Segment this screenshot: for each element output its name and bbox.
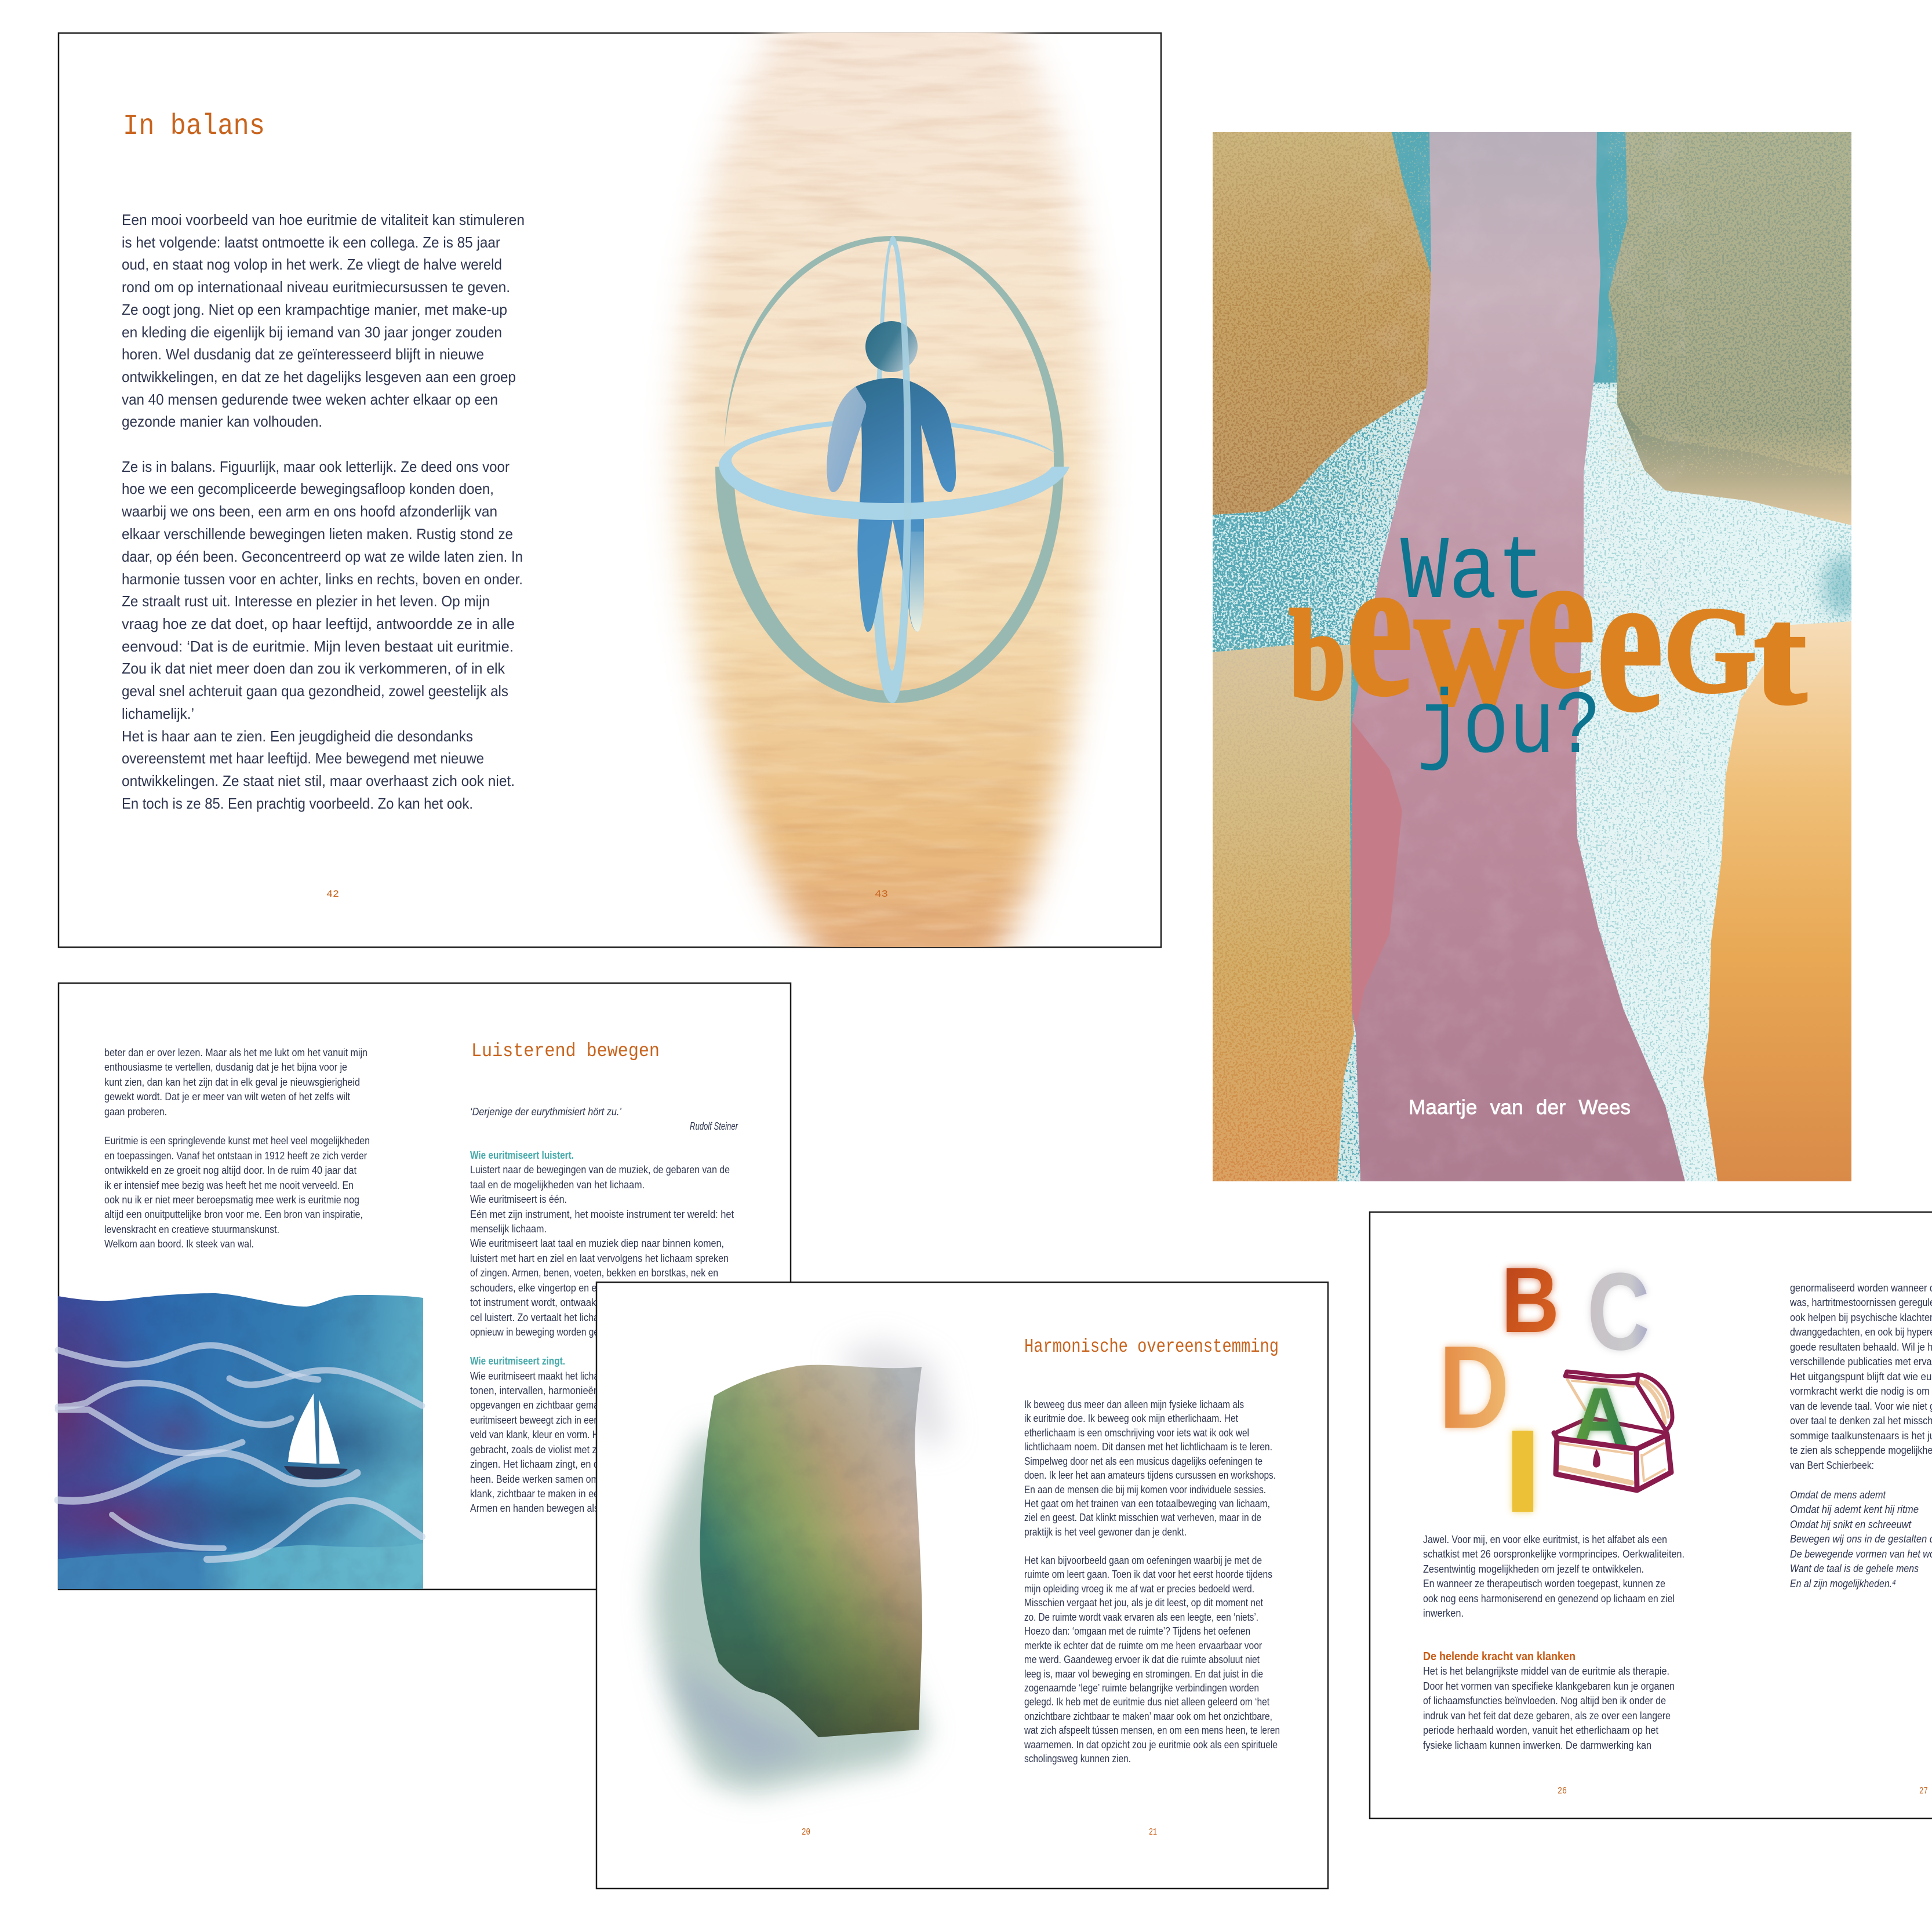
pale base right <box>1565 388 1851 1181</box>
white speckle lower left <box>1333 1020 1368 1181</box>
pink lobe <box>1352 721 1402 1030</box>
section: luistert: of zingen. Armen, benen, voeten, bekken en borstkas, nek en <box>470 1267 718 1279</box>
title word beweegt: e <box>1347 515 1413 737</box>
chest lid <box>1555 1371 1672 1433</box>
section: zingt: Wie euritmiseert maakt het licha <box>470 1370 599 1382</box>
section: zingt: veld van klank, kleur en vorm. H <box>470 1429 599 1440</box>
poem: Omdat de mens ademt <box>1790 1489 1886 1501</box>
section: luistert: Wie euritmiseert is één. <box>470 1194 567 1205</box>
title word Wat: Wat <box>1400 522 1545 624</box>
left column text: inwerken. <box>1423 1607 1464 1619</box>
body text: harmonie tussen voor en achter, links en rechts, boven en onder. <box>122 570 523 588</box>
left column text <box>1423 1534 1684 1619</box>
section: luistert: taal en de mogelijkheden van het lichaam. <box>470 1179 645 1191</box>
left column text: kunt zien, dan kan het zijn dat in elk geval je nieuwsgierigheid <box>104 1076 360 1088</box>
body text: Hoezo dan: ‘omgaan met de ruimte’? Tijdens het oefenen <box>1024 1625 1250 1637</box>
page number 26: 26 <box>1558 1786 1567 1797</box>
tan speckle bottom-left <box>1213 645 1354 1181</box>
body text: is het volgende: laatst ontmoette ik een collega. Ze is 85 jaar <box>122 234 500 251</box>
body text: eenvoud: ‘Dat is de euritmie. Mijn leven bestaat uit euritmie. <box>122 638 514 655</box>
sailboat <box>284 1393 348 1479</box>
left column text: altijd een onuitputtelijke bron voor me. Een bron van inspiratie, <box>104 1209 363 1220</box>
left column text: Euritmie is een springlevende kunst met heel veel mogelijkheden <box>104 1135 370 1147</box>
body text: gelegd. Ik heb met de euritmie dus niet alleen geleerd om ‘het <box>1024 1696 1269 1708</box>
left column text: Jawel. Voor mij, en voor elke euritmist, is het alfabet als een <box>1423 1534 1667 1545</box>
poem <box>1790 1489 1932 1589</box>
body text: overeenstemt met haar leeftijd. Mee bewegend met nieuwe <box>122 749 484 767</box>
section: luistert: luistert met hart en ziel en laat vervolgens het lichaam spreken <box>470 1253 729 1264</box>
quote attribution: Rudolf Steiner <box>690 1120 738 1132</box>
title word beweegt: G <box>1664 583 1756 718</box>
body text: en kleding die eigenlijk bij iemand van 30 jaar jonger zouden <box>122 323 502 341</box>
body text: Zou ik dat niet meer doen dan zou ik verkommeren, of in elk <box>122 660 505 677</box>
body text: rond om op internationaal niveau euritmiecursussen te geven. <box>122 278 510 296</box>
section text: Het is het belangrijkste middel van de euritmie als therapie. <box>1423 1665 1669 1677</box>
bottom-right colour field <box>1703 621 1851 1181</box>
title word jou: jou? <box>1417 677 1601 779</box>
title word beweegt <box>1289 510 1806 752</box>
page frame <box>59 983 791 1589</box>
body text: lichamelijk.’ <box>122 705 194 722</box>
page frame <box>1370 1212 1932 1818</box>
section: zingt: tonen, intervallen, harmonieën <box>470 1385 599 1396</box>
body text: horen. Wel dusdanig dat ze geïnteresseerd blijft in nieuwe <box>122 345 484 363</box>
panel: spread Harmonische overeenstemming <box>596 1282 1328 1889</box>
teal base cross <box>1213 132 1851 1181</box>
body text: Ze is in balans. Figuurlijk, maar ook letterlijk. Ze deed ons voor <box>122 458 510 475</box>
body text: wat zich afspeelt tússen mensen, en om een mens heen, te leren <box>1024 1724 1280 1736</box>
illustration: figure in sphere on sand oval <box>658 32 1118 947</box>
section: zingt: Wie euritmiseert zingt. <box>470 1355 565 1367</box>
chest back rim <box>1555 1418 1666 1433</box>
title word beweegt: e <box>1597 531 1663 752</box>
body text: geval snel achteruit gaan qua gezondheid, zowel geestelijk als <box>122 682 508 700</box>
left column text: en toepassingen. Vanaf het ontstaan in 1912 heeft ze zich verder <box>104 1150 367 1162</box>
sphere outer band <box>715 236 1064 703</box>
section: zingt <box>470 1355 599 1514</box>
heading: Luisterend bewegen <box>471 1040 660 1062</box>
vertical ring, back strand <box>872 236 911 703</box>
section: luistert: menselijk lichaam. <box>470 1223 547 1235</box>
body text: Ik beweeg dus meer dan alleen mijn fysieke lichaam als <box>1024 1399 1244 1410</box>
section text: periode herhaald worden, vanuit het etherlichaam op het <box>1423 1724 1658 1736</box>
left column text: Welkom aan boord. Ik steek van wal. <box>104 1238 254 1250</box>
author: Maartje van der Wees <box>1409 1096 1631 1119</box>
tan speckle top-right <box>1609 132 1851 475</box>
section: zingt: heen. Beide werken samen om <box>470 1473 599 1485</box>
watercolour sea <box>0 1252 446 1589</box>
white speckle right field <box>1565 383 1851 1181</box>
left column text: gewekt wordt. Dat je er meer van wilt weten of het zelfs wilt <box>104 1091 350 1103</box>
section: zingt: euritmiseert beweegt zich in een <box>470 1414 599 1426</box>
section: luistert: schouders, elke vingertop en el <box>470 1282 599 1294</box>
title word beweegt: e <box>1526 510 1595 728</box>
left column text: levenskracht en creatieve stuurmanskunst. <box>104 1224 279 1235</box>
body text: mijn opleiding vroeg ik me af wat er precies bedoeld werd. <box>1024 1583 1254 1595</box>
left column text: beter dan er over lezen. Maar als het me lukt om het vanuit mijn <box>104 1047 368 1058</box>
page number 43: 43 <box>875 889 888 900</box>
body text: zogenaamde ‘lege’ ruimte belangrijke verbindingen worden <box>1024 1682 1259 1694</box>
body text: Simpelweg door net als een musicus dagelijks oefeningen te <box>1024 1456 1262 1467</box>
page frame <box>596 1282 1328 1889</box>
body text: ontwikkelingen. Ze staat niet stil, maar overhaast zich ook niet. <box>122 772 515 789</box>
body text: Ze straalt rust uit. Interesse en plezier in het leven. Op mijn <box>122 592 490 610</box>
title word beweegt: t <box>1754 578 1806 733</box>
left column text: gaan proberen. <box>104 1106 167 1118</box>
body text: ruimte om leert gaan. Toen ik dat voor het eerst hoorde tijdens <box>1024 1569 1272 1580</box>
body text: Misschien vergaat het jou, als je dit leest, op dit moment net <box>1024 1597 1263 1609</box>
poem: Want de taal is de gehele mens <box>1790 1563 1919 1574</box>
body text: Een mooi voorbeeld van hoe euritmie de vitaliteit kan stimuleren <box>122 211 525 228</box>
left arm watercolour highlight <box>827 387 866 492</box>
panel: spread In balans <box>59 32 1161 947</box>
illustration: leaf shape <box>652 1339 951 1793</box>
heading: Harmonische overeenstemming <box>1024 1336 1279 1358</box>
left column text: ontwikkeld en ze groeit nog altijd door. In de ruim 40 jaar dat <box>104 1165 356 1176</box>
top-left colour field <box>1213 132 1431 515</box>
page number 42: 42 <box>326 889 339 900</box>
body text: ik euritmie doe. Ik beweeg ook mijn etherlichaam. Het <box>1024 1413 1238 1424</box>
left column text: ook nu ik er niet meer beroepsmatig mee werk is euritmie nog <box>104 1194 359 1206</box>
left column text <box>104 1047 370 1250</box>
blurred shadow <box>652 1433 927 1793</box>
left column text: Zesentwintig mogelijkheden om jezelf te ontwikkelen. <box>1423 1563 1644 1575</box>
body text: van 40 mensen gedurende twee weken achter elkaar op een <box>122 391 498 408</box>
body text: etherlichaam is een omschrijving voor iets wat ik ook wel <box>1024 1427 1249 1439</box>
chest body <box>1554 1432 1671 1490</box>
bottom-left colour field <box>1213 645 1354 1181</box>
body text: me werd. Gaandeweg ervoer ik dat die ruimte absoluut niet <box>1024 1654 1260 1665</box>
head <box>865 321 918 372</box>
section: zingt: zingen. Het lichaam zingt, en d <box>470 1458 599 1470</box>
poem: Omdat hij snikt en schreeuwt <box>1790 1519 1912 1530</box>
body text <box>1024 1399 1280 1764</box>
body text: lichtlichaam noem. Dit dansen met het lichtlichaam is te leren. <box>1024 1441 1272 1453</box>
subheading: De helende kracht van klanken <box>1423 1650 1576 1663</box>
section: luistert <box>470 1149 734 1338</box>
sand oval background <box>658 32 1118 947</box>
pale right leg <box>909 532 924 632</box>
top-right colour field <box>1609 132 1851 525</box>
body text: En aan de mensen die bij mij komen voor individuele sessies. <box>1024 1484 1266 1496</box>
section: luistert: Wie euritmiseert luistert. <box>470 1149 574 1161</box>
title word beweegt: b <box>1289 584 1346 726</box>
page number 20: 20 <box>802 1827 810 1838</box>
section: luistert: Luistert naar de bewegingen van de muziek, de gebaren van de <box>470 1164 730 1176</box>
body <box>827 378 956 632</box>
body text: gezonde manier kan volhouden. <box>122 413 322 430</box>
body text: Ze oogt jong. Niet op een krampachtige manier, met make-up <box>122 301 507 318</box>
section text: indruk van het feit dat deze gebaren, als ze over een langere <box>1423 1710 1671 1722</box>
tan speckle top-left <box>1213 132 1431 515</box>
letter C: C <box>1587 1250 1650 1373</box>
body text: praktijk is het veel gewoner dan je denkt. <box>1024 1526 1187 1538</box>
body text: daar, op één been. Geconcentreerd op wat ze wilde laten zien. In <box>122 548 523 565</box>
panel: spread Luisterend bewegen <box>0 983 791 1589</box>
section: zingt: gebracht, zoals de violist met zi <box>470 1444 599 1456</box>
letter B: B <box>1501 1248 1559 1352</box>
body text: leeg is, maar vol beweging en stromingen. En dat juist in die <box>1024 1668 1263 1680</box>
body text: Het gaat om het trainen van een totaalbeweging van lichaam, <box>1024 1498 1270 1509</box>
body text: onzichtbare zichtbaar te maken’ maar ook om het onzichtbare, <box>1024 1711 1272 1722</box>
leaf <box>690 1356 933 1745</box>
right column text <box>1789 1282 1932 1471</box>
title: In balans <box>123 110 265 143</box>
section: luistert: opnieuw in beweging worden ge <box>470 1326 599 1338</box>
horizontal ring, back arc <box>719 419 1069 520</box>
body text: oud, en staat nog volop in het werk. Ze vliegt de halve wereld <box>122 256 502 273</box>
section: zingt: Armen en handen bewegen als <box>470 1502 599 1514</box>
wave lines <box>58 1345 422 1559</box>
lilac top halo <box>835 1339 951 1449</box>
body text: zo. De ruimte wordt vaak ervaren als een leegte, een ‘niets’. <box>1024 1611 1258 1623</box>
body text: elkaar verschillende bewegingen lieten maken. Rustig stond ze <box>122 525 513 543</box>
page number 21: 21 <box>1149 1827 1157 1838</box>
body text: ziel en geest. Dat klinkt misschien wat verheven, maar in de <box>1024 1512 1261 1523</box>
illustration: sea with sailboat <box>0 1252 446 1589</box>
letter D: D <box>1439 1322 1509 1453</box>
panel: spread alfabet <box>1370 1212 1932 1818</box>
body text: En toch is ze 85. Een prachtig voorbeeld. Zo kan het ook. <box>122 795 473 812</box>
section text: fysieke lichaam kunnen inwerken. De darmwerking kan <box>1423 1740 1651 1751</box>
river cloud texture <box>1352 132 1685 1181</box>
quote: ‘Derjenige der eurythmisiert hört zu.’ <box>470 1106 622 1118</box>
horizontal ring, front arc <box>719 464 1069 520</box>
poem: Omdat hij ademt kent hij ritme <box>1790 1504 1919 1515</box>
body text: ontwikkelingen, en dat ze het dagelijks lesgeven aan een groep <box>122 368 516 385</box>
right column text: van Bert Schierbeek: <box>1790 1460 1874 1471</box>
page frame <box>59 33 1161 947</box>
left column text: enthousiasme te vertellen, dusdanig dat je het bijna voor je <box>104 1061 347 1073</box>
left column text: schatkist met 26 oorspronkelijke vormprincipes. Oerkwaliteiten. <box>1423 1548 1684 1560</box>
body text: waarbij we ons been, een arm en ons hoofd afzonderlijk van <box>121 503 497 520</box>
section: zingt: opgevangen en zichtbaar gema <box>470 1399 599 1411</box>
body text: hoe we een gecompliceerde bewegingsafloop konden doen, <box>122 480 494 497</box>
teal patch right edge <box>1822 555 1864 616</box>
body text: Het kan bijvoorbeeld gaan om oefeningen waarbij je met de <box>1024 1555 1262 1566</box>
letter I: I <box>1502 1406 1543 1537</box>
white speckle left band <box>1213 383 1432 655</box>
body text: Het is haar aan te zien. Een jeugdigheid die desondanks <box>122 727 473 745</box>
keyhole <box>1593 1449 1600 1468</box>
left column text: ook nog eens harmoniserend en genezend op lichaam en ziel <box>1423 1593 1675 1604</box>
section: zingt: klank, zichtbaar te maken in ee <box>470 1488 599 1500</box>
vertical ring, front strand <box>872 236 911 703</box>
poem: En al zijn mogelijkheden.⁴ <box>1790 1578 1896 1589</box>
body text <box>121 211 525 812</box>
page number 27: 27 <box>1919 1786 1928 1797</box>
body text: vraag hoe ze dat doet, op haar leeftijd, antwoordde ze in alle <box>122 615 515 632</box>
section: luistert: cel luistert. Zo vertaalt het licha <box>470 1312 599 1323</box>
section: luistert: Wie euritmiseert laat taal en muziek diep naar binnen komen, <box>470 1238 724 1249</box>
section: luistert: tot instrument wordt, ontwaakt <box>470 1297 599 1308</box>
title word beweegt: w <box>1414 544 1523 743</box>
letter A: A <box>1572 1371 1629 1463</box>
section text <box>1423 1665 1675 1751</box>
section text: Door het vormen van specifieke klankgebaren kun je organen <box>1423 1680 1675 1692</box>
left column text: En wanneer ze therapeutisch worden toegepast, kunnen ze <box>1423 1578 1665 1589</box>
left column text: ik er intensief mee bezig was heeft het me nooit verveeld. En <box>104 1180 354 1191</box>
body text: scholingsweg kunnen zien. <box>1024 1753 1131 1764</box>
lavender lower shadow <box>667 1658 823 1768</box>
illustration: letters and treasure chest <box>1439 1248 1672 1537</box>
panel: book cover <box>1213 132 1864 1181</box>
body text: merkte ik echter dat de ruimte om me heen ervaarbaar voor <box>1024 1640 1262 1651</box>
section text: of lichaamsfuncties beïnvloeden. Nog altijd ben ik onder de <box>1423 1695 1666 1707</box>
body text: waarnemen. In dat opzicht zou je euritmie ook als een spirituele <box>1024 1739 1278 1751</box>
body text: doen. Ik leer het aan amateurs tijdens cursussen en workshops. <box>1024 1469 1276 1481</box>
section: luistert: Eén met zijn instrument, het mooiste instrument ter wereld: het <box>470 1209 734 1220</box>
mauve river <box>1352 132 1685 1181</box>
